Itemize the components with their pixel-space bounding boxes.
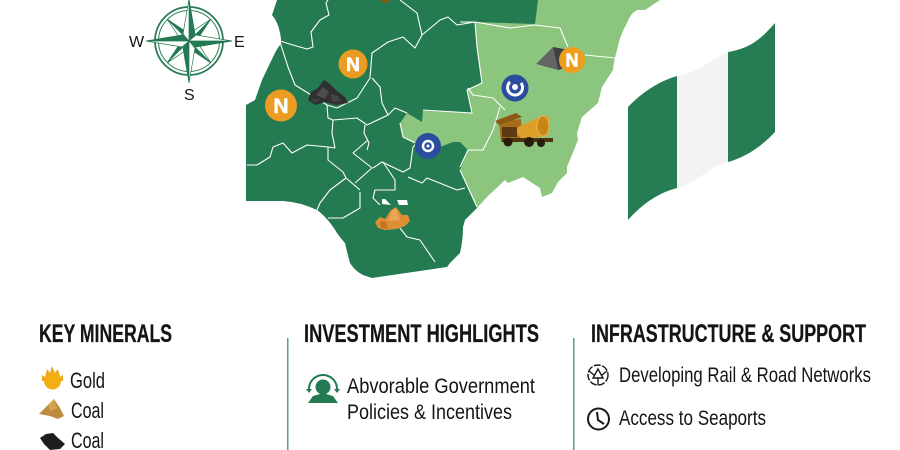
label: gold: Gold <box>70 368 105 393</box>
light green regions <box>400 0 660 208</box>
icon: small mineral at top edge <box>380 0 390 3</box>
icon: government support person <box>306 375 340 403</box>
divider left <box>287 338 288 450</box>
compass rose <box>129 0 245 104</box>
icon: grey pyramid <box>536 47 572 70</box>
compass rose: S <box>184 87 195 104</box>
dark green regions <box>246 0 540 278</box>
heading: investment highlights: INVESTMENT HIGHLIGHTS <box>304 320 539 348</box>
heading: key minerals: KEY MINERALS <box>39 320 172 348</box>
text: government policies: Abvorable Government <box>347 375 535 398</box>
panel: infrastructure and support <box>588 320 871 430</box>
icon: N badge west: N <box>273 95 289 118</box>
icon: N badge west <box>265 90 297 122</box>
panel: investment highlights <box>304 320 539 424</box>
icon: N badge east: N <box>566 50 578 70</box>
icon: mining truck <box>495 113 553 147</box>
panel: key minerals <box>39 320 172 450</box>
map of Nigeria <box>246 0 660 278</box>
icon: N badge north <box>338 50 368 78</box>
region boundaries <box>247 0 615 262</box>
icon: gold nugget <box>42 366 63 390</box>
icon: seaport clock <box>588 408 609 430</box>
icon: coal ore brown <box>39 399 64 419</box>
icon: coal pile <box>308 80 348 105</box>
icon: gold ore pile <box>375 207 410 230</box>
icon: rail and road network <box>588 365 608 385</box>
icon: coal ore black <box>40 433 65 450</box>
icon: N badge north: N <box>346 55 360 76</box>
text: government policies: Policies & Incentives <box>347 401 512 424</box>
compass rose: W <box>129 34 145 51</box>
label: coal: Coal <box>71 398 104 423</box>
icon: blue badge central <box>415 133 441 159</box>
compass rose: E <box>234 34 245 51</box>
icon: N badge east <box>559 47 585 73</box>
icon: blue badge east <box>502 74 528 102</box>
Nigerian flag <box>628 23 775 220</box>
text: seaports: Access to Seaports <box>619 407 766 430</box>
text: government policies <box>347 375 535 424</box>
divider right <box>573 338 574 450</box>
